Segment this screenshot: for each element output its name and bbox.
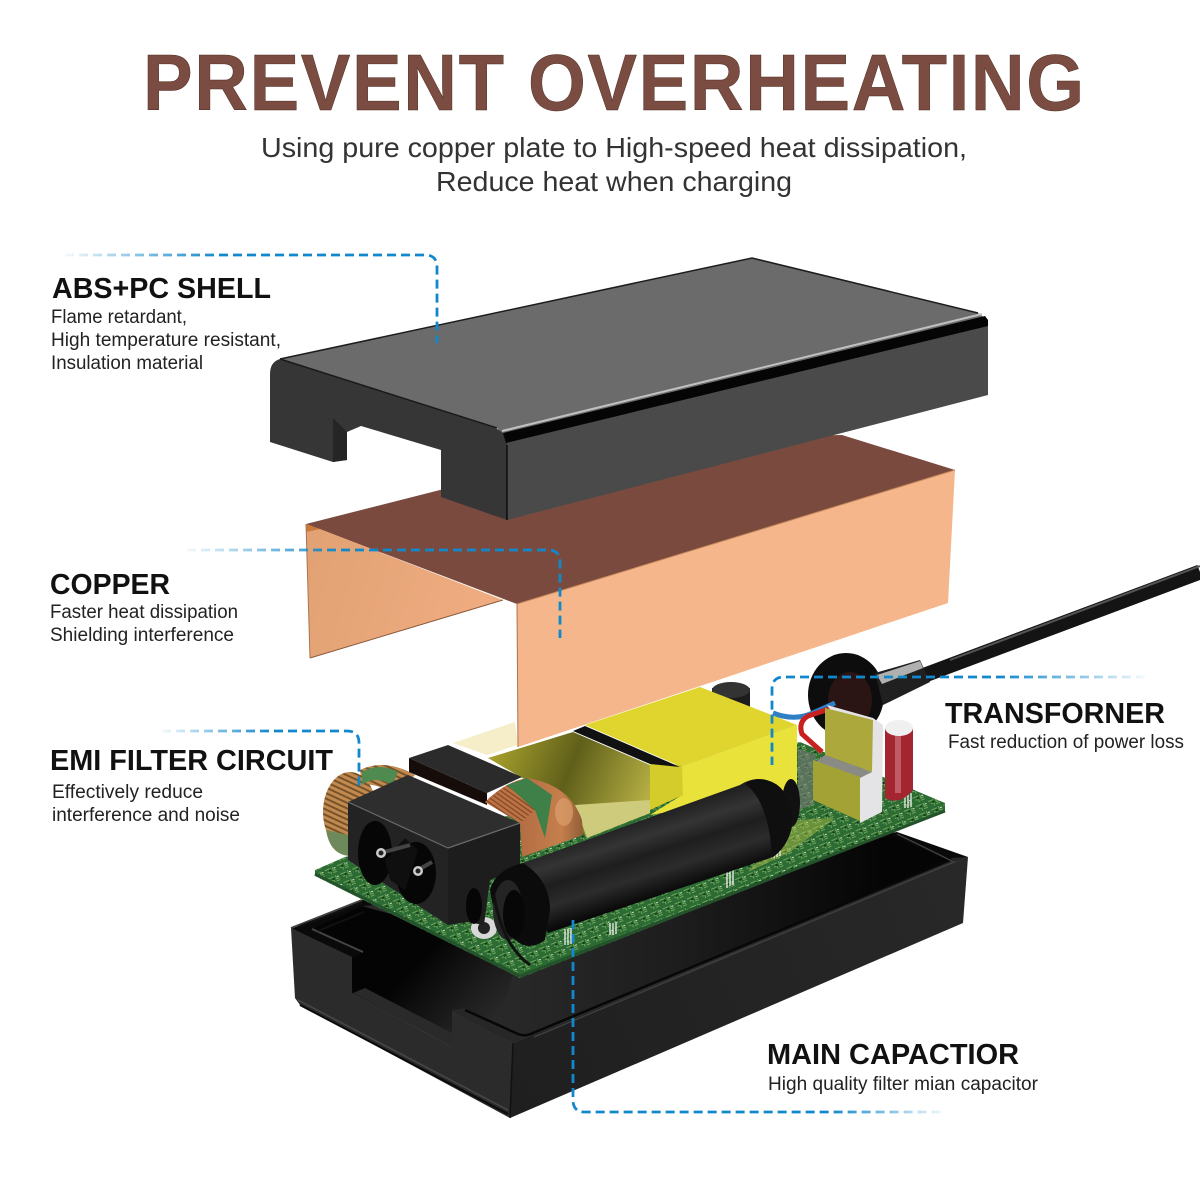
label: ABS+PC shell: ABS+PC SHELL [52,273,271,305]
label: EMI filter circuit: interference and noise [52,805,240,826]
label: ABS+PC shell: Flame retardant, [51,307,187,328]
AC inlet connector [348,775,520,925]
small capacitor behind transformer [712,682,750,714]
safety capacitor [813,705,883,823]
label: copper: Shielding interference [50,625,234,646]
label: transformer: Fast reduction of power loss [948,732,1184,753]
callout line: main capacitor [573,920,945,1112]
copper shield [306,435,955,747]
wires [773,703,835,752]
title: PREVENT OVERHEATING [143,39,1084,128]
callout line: EMI filter [162,731,359,787]
label: main capacitor: High quality filter mian capacitor [768,1074,1039,1095]
top shell [270,258,988,520]
bottom housing tray [291,832,968,1118]
transformer inner cavity [488,732,650,838]
subtitle: Reduce heat when charging [436,166,792,197]
label: copper: COPPER [50,569,170,601]
left winding coil [323,765,415,856]
label: ABS+PC shell [51,273,281,374]
label: main capacitor [767,1039,1039,1095]
red electrolytic capacitor [885,720,913,801]
label: EMI filter circuit: EMI FILTER CIRCUIT [50,745,333,777]
label: ABS+PC shell: High temperature resistant, [51,330,281,351]
printed circuit board [315,742,945,978]
label: copper [50,569,238,646]
label: copper: Faster heat dissipation [50,602,238,623]
label: main capacitor: MAIN CAPACTIOR [767,1039,1019,1071]
label: transformer [945,698,1184,753]
yellow transformer body [573,687,797,815]
subtitle: Using pure copper plate to High-speed heat dissipation, [261,132,967,163]
illustration: exploded charger [270,258,1200,1118]
subtitle [261,132,967,197]
main capacitor [490,779,800,965]
callout line: shell [65,255,437,343]
label: transformer: TRANSFORNER [945,698,1165,730]
label: ABS+PC shell: Insulation material [51,353,203,374]
callout line: copper [187,550,560,638]
cream insulation sheet [453,722,518,755]
label: EMI filter circuit [50,745,333,826]
callout line: transformer [772,677,1145,765]
label: EMI filter circuit: Effectively reduce [52,782,203,803]
right winding coil [485,778,583,857]
iron block behind connector [409,745,522,805]
power cable with grommet [808,566,1200,737]
